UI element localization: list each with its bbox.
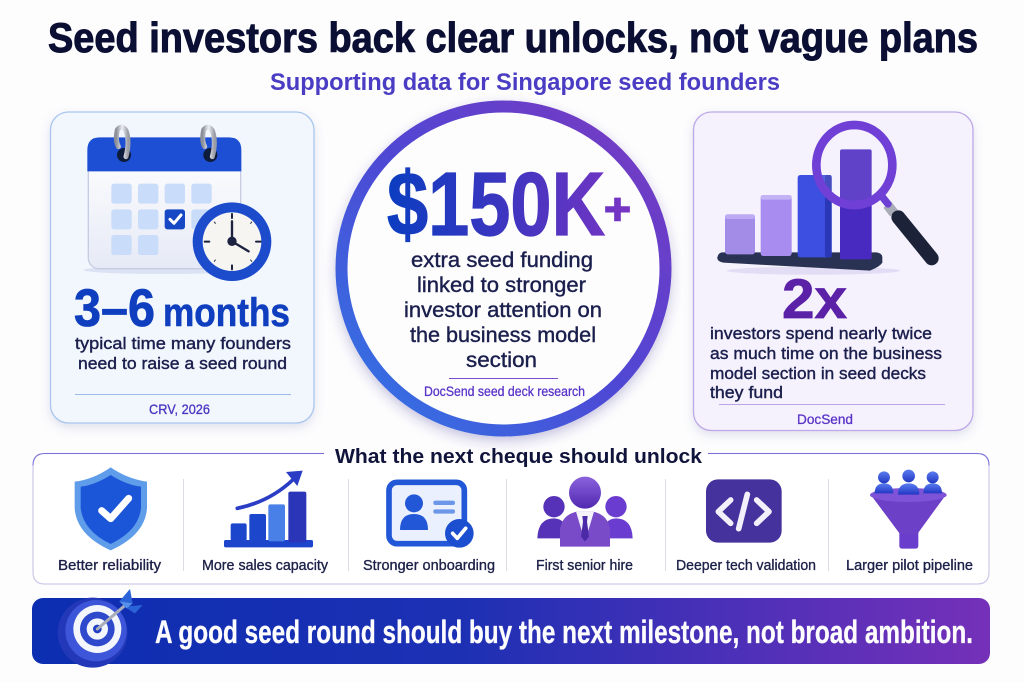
stat: 3–6 months: 3–6: [74, 279, 155, 338]
description: section: [466, 349, 537, 372]
description: as much time on the business: [710, 344, 942, 363]
label: More sales capacity: [202, 557, 328, 574]
description: the business model: [410, 324, 596, 347]
description: investor attention on: [404, 299, 602, 322]
icon: calendar with clock: [83, 127, 271, 281]
banner: takeaway: [32, 589, 990, 668]
banner background: [32, 598, 990, 664]
panel: 2x: [694, 112, 973, 430]
ring: [342, 106, 666, 430]
panel: what the next cheque should unlock: [33, 445, 989, 584]
card background: [50, 112, 314, 423]
description: [710, 324, 942, 402]
label: Deeper tech validation: [676, 557, 816, 574]
label: Better reliability: [58, 557, 161, 574]
description: linked to stronger: [417, 274, 586, 297]
icon: ID card: [389, 482, 474, 548]
description: model section in seed decks: [710, 364, 926, 383]
stat: $150K+: $150K: [387, 155, 605, 255]
icon: bar chart with magnifier: [717, 125, 932, 275]
stat: 2x: 2x: [782, 267, 847, 330]
stat: 3–6 months: months: [163, 291, 290, 335]
icon: target with arrow: [58, 589, 143, 668]
description: they fund: [710, 383, 783, 402]
description: [75, 334, 291, 373]
icon: code: [706, 479, 782, 543]
label: First senior hire: [536, 557, 633, 574]
panel heading: What the next cheque should unlock: [335, 445, 703, 468]
card background: [694, 112, 973, 430]
source: DocSend seed deck research: [424, 383, 585, 399]
description: need to raise a seed round: [78, 354, 287, 373]
source: DocSend: [797, 411, 853, 427]
panel: 3–6 months: [50, 112, 314, 423]
description: extra seed funding: [411, 249, 593, 272]
label: Larger pilot pipeline: [846, 557, 973, 574]
label: Stronger onboarding: [363, 557, 495, 574]
description: investors spend nearly twice: [710, 324, 932, 343]
icon: shield: [75, 467, 147, 550]
icon: growth chart: [224, 471, 313, 547]
source: CRV, 2026: [149, 401, 210, 417]
icon: funnel: [870, 470, 947, 549]
panel: $150K+ circle: [342, 106, 666, 430]
panel frame: [33, 454, 989, 584]
icon: senior hire: [537, 477, 633, 547]
description: [404, 249, 602, 372]
stat: 3–6 months: [74, 279, 290, 338]
stat: $150K+: +: [604, 185, 631, 234]
description: typical time many founders: [75, 334, 291, 353]
subtitle: Supporting data for Singapore seed founders: [270, 69, 780, 96]
